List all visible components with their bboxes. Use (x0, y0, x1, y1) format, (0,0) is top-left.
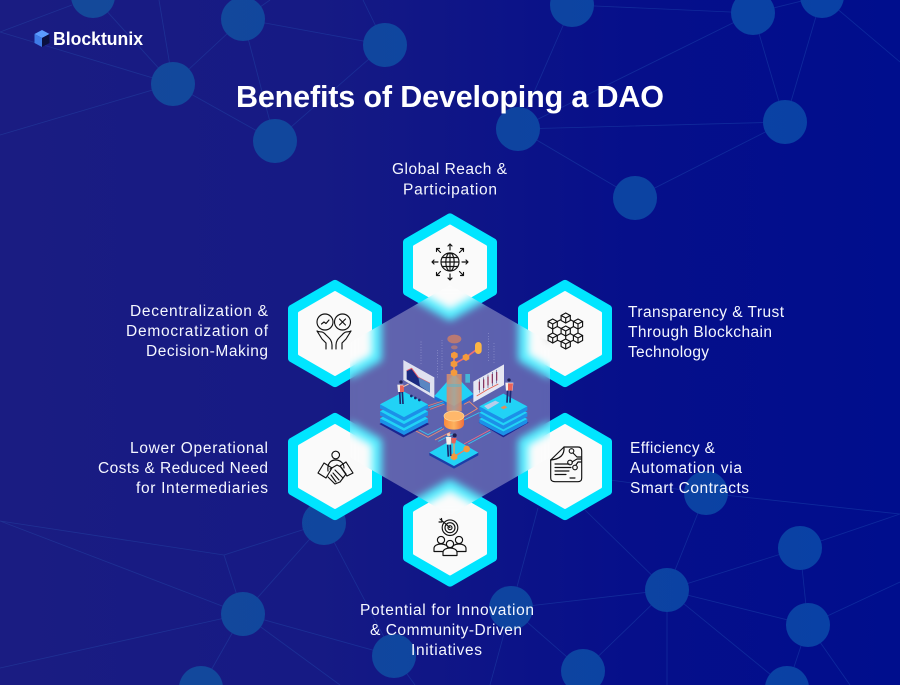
icon: hands holding check and cross (317, 314, 351, 349)
label: efficiency: Efficiency & (630, 440, 716, 457)
back platform (434, 374, 473, 409)
hexagon: transparency (522, 284, 608, 383)
label: lower costs: for Intermediaries (136, 480, 268, 497)
right person (505, 378, 513, 403)
label: transparency: Transparency & Trust (628, 304, 785, 321)
label: transparency: Through Blockchain (628, 324, 772, 341)
icon: logo cube (34, 30, 50, 47)
label: innovation: Initiatives (411, 642, 482, 659)
dotted data lines (421, 333, 494, 378)
hexagon: decentralization (292, 284, 378, 383)
left server stack (379, 392, 429, 437)
label: decentralization: Democratization of (126, 323, 269, 340)
label: innovation (360, 602, 534, 659)
hexagon: efficiency (522, 417, 608, 516)
label: efficiency: Smart Contracts (630, 480, 749, 497)
icon: globe with arrows (432, 244, 468, 280)
left person (397, 380, 409, 404)
label: decentralization: Decision-Making (146, 343, 268, 360)
hexagon: global reach (407, 217, 493, 317)
label: lower costs (98, 440, 268, 497)
icon: handshake with person (318, 451, 353, 484)
hexagon: innovation (407, 483, 493, 583)
label: transparency (628, 304, 785, 361)
right candlestick screen (473, 364, 504, 402)
hexagon: lower costs (292, 417, 378, 516)
bottom platform (429, 439, 478, 469)
left chart screen (403, 360, 434, 398)
label: lower costs: Costs & Reduced Need (98, 460, 268, 477)
central frosted hexagon (350, 285, 550, 515)
label: transparency: Technology (628, 344, 709, 361)
label: innovation: Potential for Innovation (360, 602, 534, 619)
icon: blockchain cubes (548, 313, 583, 349)
label: global reach (392, 161, 508, 198)
label: lower costs: Lower Operational (130, 440, 268, 457)
node chain (447, 335, 482, 376)
label: decentralization: Decentralization & (130, 303, 269, 320)
title: Benefits of Developing a DAO (236, 80, 664, 114)
two people on bottom platform (446, 433, 457, 457)
right server stack (479, 394, 529, 437)
label: decentralization (126, 303, 269, 360)
logo: Blocktunix (53, 29, 143, 49)
label: efficiency: Automation via (630, 460, 742, 477)
icon: target and community (434, 518, 466, 556)
label: efficiency (630, 440, 749, 497)
label: innovation: & Community-Driven (370, 622, 522, 639)
icon: smart contract document (551, 447, 582, 482)
central cylinder and beam (444, 374, 464, 430)
circuit lines (416, 401, 491, 444)
label: global reach: Participation (403, 182, 497, 198)
label: global reach: Global Reach & (392, 161, 508, 178)
